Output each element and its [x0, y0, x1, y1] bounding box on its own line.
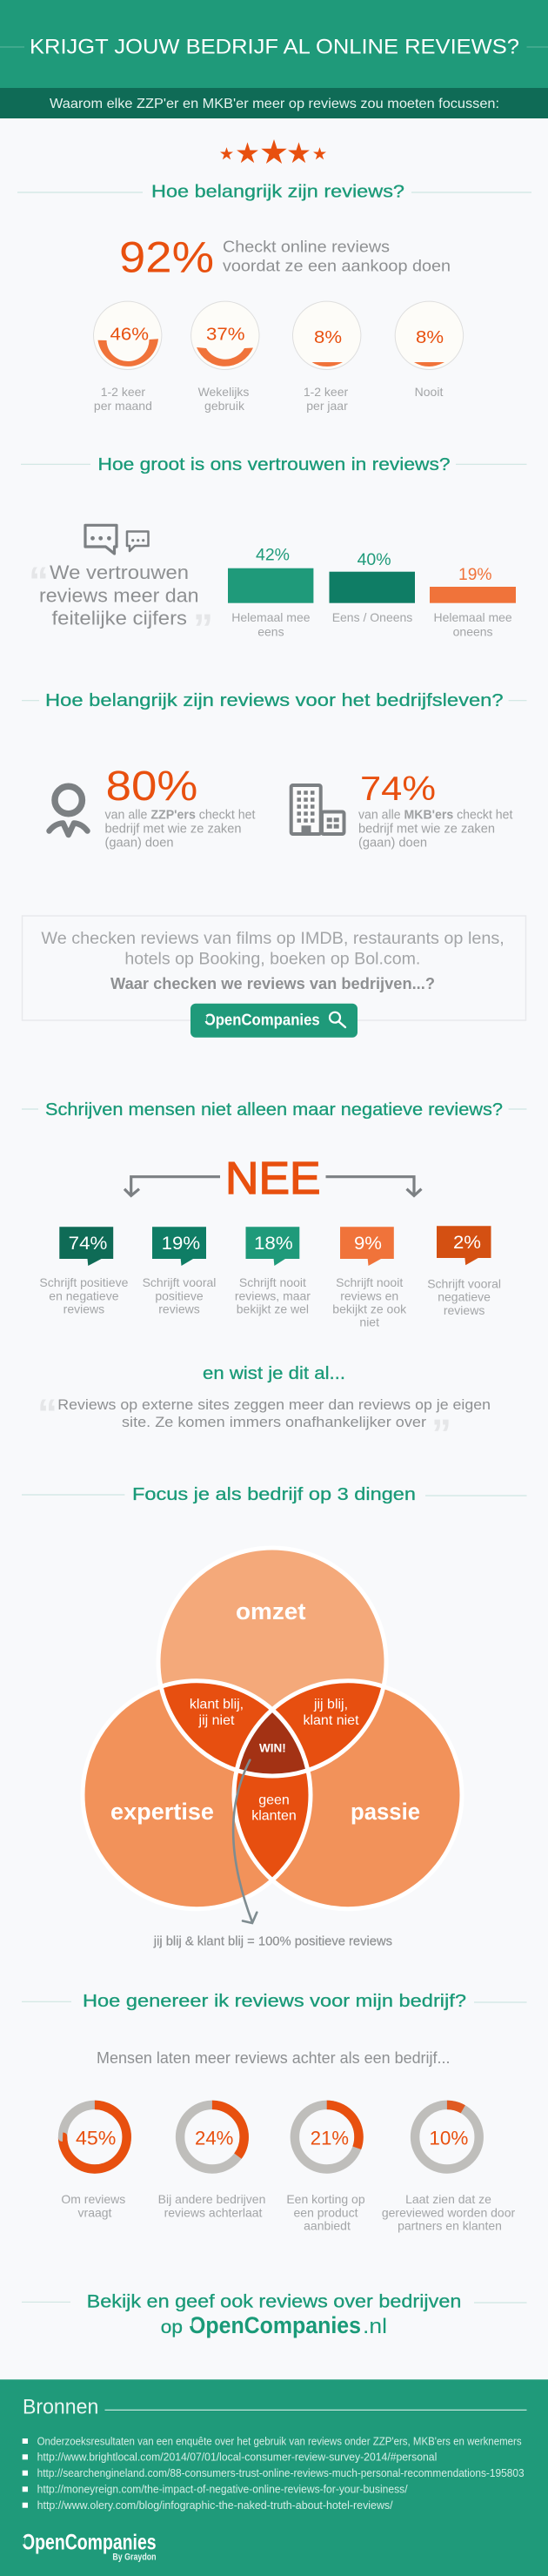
- stat: 2%: 2%: [453, 1233, 481, 1253]
- call to action: op: [161, 2317, 183, 2337]
- stat: 18%: [235, 1227, 311, 1316]
- bar: eens / oneens: [329, 550, 415, 624]
- gauge: 37%: Wekelijks: [198, 385, 249, 399]
- panel: bedrijfsleven: [22, 690, 527, 851]
- stat: 9%: bekijkt ze ook: [332, 1302, 407, 1316]
- panel: hoe belangrijk zijn reviews: [17, 182, 531, 413]
- stat: 9%: reviews en: [340, 1288, 398, 1302]
- stat: 80%: (gaan) doen: [104, 837, 174, 851]
- donut: 21%: [286, 2105, 365, 2232]
- donut: 10%: [382, 2105, 515, 2232]
- call to action: [22, 2291, 527, 2338]
- stat: 19%: positieve: [155, 1288, 204, 1302]
- stat: 74%: van alle MKB'ers checkt het: [358, 809, 512, 823]
- arrow: left: [124, 1177, 220, 1196]
- gauge: 8% per jaar: per jaar: [306, 399, 348, 413]
- heading: Schrijven mensen niet alleen maar negatieve reviews?: [45, 1100, 503, 1120]
- stat: 80%: van alle ZZP'ers checkt het: [104, 809, 256, 823]
- quote: We vertrouwen: [50, 562, 189, 583]
- donut: 10%: gereviewed worden door: [382, 2205, 515, 2219]
- heading: Hoe groot is ons vertrouwen in reviews?: [97, 454, 451, 474]
- label: klant blij, jij niet: jij niet: [198, 1713, 235, 1728]
- donut: 45%: vraagt: [78, 2205, 112, 2219]
- stat: 9%: 9%: [354, 1234, 382, 1254]
- button: OpenCompanies search: [190, 1004, 358, 1038]
- stat: 2%: reviews: [444, 1303, 485, 1317]
- gauge: 37%: gebruik: [204, 399, 245, 413]
- donut: 24%: 24%: [195, 2127, 233, 2149]
- source list: http://www.olery.com/blog/infographic-the-naked-truth-about-hotel-reviews/: [37, 2499, 393, 2512]
- label: jij blij, klant niet: jij blij,: [313, 1698, 348, 1712]
- icon: building: [291, 785, 344, 834]
- stat: 74%: Schrijft positieve: [39, 1275, 129, 1289]
- heading: Focus je als bedrijf op 3 dingen: [132, 1484, 416, 1504]
- label: klant blij, jij niet: klant blij,: [190, 1698, 244, 1712]
- stat: 18%: Schrijft nooit: [239, 1275, 306, 1289]
- stat: 19%: reviews: [158, 1302, 200, 1316]
- donut: 21%: 21%: [311, 2127, 349, 2149]
- stat: 9%: niet: [359, 1315, 379, 1328]
- stat: 9%: Schrijft nooit: [336, 1275, 403, 1289]
- quote: Reviews op externe sites zeggen meer dan reviews op je eigen: [57, 1396, 491, 1413]
- icon: five stars: [220, 139, 326, 164]
- stat: 19%: 19%: [162, 1234, 200, 1254]
- gauge: 8% per jaar: [292, 301, 361, 413]
- stat: 19%: Schrijft vooral: [143, 1275, 216, 1289]
- source list: [23, 2435, 525, 2512]
- logo: OpenCompanies by Graydon: By Graydon: [112, 2552, 157, 2563]
- stat: 74%: en negatieve: [49, 1288, 119, 1302]
- bar: helemaal mee eens: Helemaal mee: [231, 610, 311, 624]
- venn diagram: [83, 1548, 462, 1923]
- label: klant blij, jij niet: [190, 1698, 244, 1728]
- donut: 24%: [158, 2105, 265, 2219]
- panel: header: [0, 0, 548, 118]
- stat: 74%: 74%: [360, 770, 436, 808]
- stat: 74%: [39, 1227, 129, 1316]
- stat: 18%: bekijkt ze wel: [237, 1302, 309, 1316]
- stat: 92%: [119, 232, 451, 281]
- stat: 2%: negatieve: [438, 1290, 491, 1304]
- stat: 9%: [332, 1227, 407, 1328]
- label: WIN: WIN!: [259, 1742, 286, 1755]
- donut: 10%: 10%: [429, 2127, 468, 2149]
- answer: NEE: NEE: [225, 1153, 320, 1204]
- quote: “: [29, 559, 49, 604]
- caption: jij blij & klant blij = 100% positieve reviews: [153, 1934, 392, 1948]
- donut: 10%: Laat zien dat ze: [405, 2192, 491, 2206]
- quote: feitelijke cijfers: [52, 607, 187, 629]
- label: jij blij, klant niet: [303, 1698, 359, 1728]
- quote: [29, 559, 213, 651]
- donut: 45%: [61, 2105, 127, 2219]
- donut: 21%: aanbiedt: [304, 2218, 351, 2232]
- donut: 45%: 45%: [76, 2127, 116, 2149]
- stat: 18%: reviews, maar: [235, 1288, 311, 1302]
- intro text: Mensen laten meer reviews achter als een bedrijf...: [97, 2049, 451, 2067]
- stat: 18%: 18%: [254, 1234, 293, 1254]
- arrow: right: [325, 1177, 421, 1196]
- bar: helemaal mee oneens: [430, 565, 516, 639]
- stat: 80%: bedrijf met wie ze zaken: [104, 823, 242, 837]
- donut: 21%: een product: [294, 2205, 358, 2219]
- stat: 74%: bedrijf met wie ze zaken: [358, 823, 495, 837]
- gauge: 8% nooit: 8%: [416, 328, 444, 347]
- stat: 92%: 92%: [119, 232, 214, 281]
- heading: Hoe genereer ik reviews voor mijn bedrijf?: [83, 1991, 466, 2011]
- quote: [37, 1391, 491, 1456]
- stat: 80%: [104, 763, 256, 851]
- label: geen klanten: [251, 1793, 297, 1824]
- call to action: .nl: [363, 2315, 387, 2338]
- arrow: win to caption: [233, 1760, 257, 1923]
- quote: ”: [193, 606, 213, 651]
- donut: 45%: Om reviews: [61, 2192, 125, 2206]
- panel: bronnen: [0, 2379, 548, 2576]
- stat: 92%: Checkt online reviews: [223, 237, 390, 255]
- quote: reviews meer dan: [39, 584, 199, 606]
- stat: 2%: Schrijft vooral: [427, 1276, 501, 1290]
- bar: helemaal mee eens: [228, 545, 313, 639]
- panel: negatieve reviews: [22, 1100, 527, 1328]
- stat: 74%: (gaan) doen: [358, 837, 427, 851]
- bar: helemaal mee eens: eens: [257, 625, 284, 639]
- donut: 24%: Bij andere bedrijven: [158, 2192, 265, 2206]
- stat: 92%: voordat ze een aankoop doen: [223, 257, 451, 275]
- logo: OpenCompanies by Graydon: [21, 2530, 157, 2563]
- icon: person: [49, 786, 87, 835]
- label: geen klanten: geen: [258, 1793, 290, 1808]
- text block: We checken reviews van films op IMDB, restaurants op lens,: [41, 930, 505, 948]
- bar: helemaal mee eens: 42%: [256, 545, 290, 564]
- source list: http://www.brightlocal.com/2014/07/01/local-consumer-review-survey-2014/#personal: [37, 2452, 437, 2464]
- stat: 2%: [427, 1226, 501, 1317]
- label: passie: passie: [351, 1799, 420, 1825]
- gauge: 8% per jaar: 1-2 keer: [304, 385, 349, 399]
- donut: 10%: partners en klanten: [398, 2218, 502, 2232]
- bar: helemaal mee oneens: 19%: [458, 565, 492, 584]
- bar: helemaal mee oneens: Helemaal mee: [433, 610, 512, 624]
- panel: waar checken we reviews: [23, 916, 525, 1038]
- gauge: 8% per jaar: 8%: [314, 328, 342, 347]
- logo: OpenCompanies by Graydon: OpenCompanies: [22, 2530, 157, 2554]
- gauge: 8% nooit: [395, 301, 464, 399]
- quote: ”: [431, 1411, 451, 1456]
- gauge: 46%: [94, 301, 162, 413]
- label: omzet: omzet: [236, 1598, 306, 1624]
- source list: http://moneyreign.com/the-impact-of-negative-online-reviews-for-your-business/: [37, 2484, 408, 2496]
- gauge: 37%: 37%: [206, 326, 245, 345]
- text block: hotels op Booking, boeken op Bol.com.: [124, 951, 420, 969]
- text block: Waar checken we reviews van bedrijven...?: [110, 974, 435, 992]
- stat: 19%: [143, 1227, 216, 1316]
- heading: Bronnen: [23, 2396, 98, 2419]
- stat: 80%: 80%: [106, 763, 197, 810]
- heading: Hoe belangrijk zijn reviews?: [151, 182, 404, 202]
- subtitle: Waarom elke ZZP'er en MKB'er meer op reviews zou moeten focussen:: [50, 97, 499, 111]
- donut: 21%: Een korting op: [286, 2192, 365, 2206]
- panel: en wist je dit al: [37, 1363, 491, 1456]
- label: jij blij, klant niet: klant niet: [303, 1713, 359, 1728]
- gauge: 46%: 46%: [110, 326, 149, 345]
- heading: en wist je dit al...: [203, 1363, 345, 1383]
- title: KRIJGT JOUW BEDRIJF AL ONLINE REVIEWS?: [30, 36, 519, 59]
- panel: focus op 3 dingen: [22, 1484, 527, 1948]
- stat: 74%: [358, 770, 512, 851]
- call to action: OpenCompanies: [189, 2312, 361, 2338]
- text block: [41, 930, 505, 992]
- call to action: Bekijk en geef ook reviews over bedrijven: [87, 2291, 461, 2312]
- quote: site. Ze komen immers onafhankelijker over: [122, 1414, 426, 1430]
- gauge: 8% nooit: Nooit: [415, 385, 443, 399]
- bar chart: [228, 545, 516, 639]
- button: OpenCompanies search: OpenCompanies: [204, 1011, 320, 1028]
- bar: helemaal mee oneens: oneens: [453, 625, 493, 639]
- stat: 74%: reviews: [63, 1302, 104, 1316]
- icon: speech bubbles: [85, 525, 148, 554]
- source list: http://searchengineland.com/88-consumers-trust-online-reviews-much-personal-recommendations-195803: [37, 2467, 525, 2479]
- label: expertise: expertise: [110, 1799, 214, 1825]
- gauge: 37%: [191, 301, 259, 413]
- heading: Hoe belangrijk zijn reviews voor het bedrijfsleven?: [45, 690, 504, 710]
- panel: vertrouwen: [21, 454, 527, 651]
- bar: eens / oneens: Eens / Oneens: [332, 610, 412, 624]
- label: geen klanten: klanten: [251, 1809, 297, 1824]
- panel: reviews genereren: [22, 1991, 527, 2232]
- gauge: 46%: 1-2 keer: [101, 385, 145, 399]
- stat: 74%: 74%: [69, 1234, 107, 1254]
- gauge: 46%: per maand: [94, 399, 152, 413]
- donut: 24%: reviews achterlaat: [164, 2205, 263, 2219]
- quote: “: [37, 1391, 57, 1436]
- bar: eens / oneens: 40%: [358, 550, 391, 569]
